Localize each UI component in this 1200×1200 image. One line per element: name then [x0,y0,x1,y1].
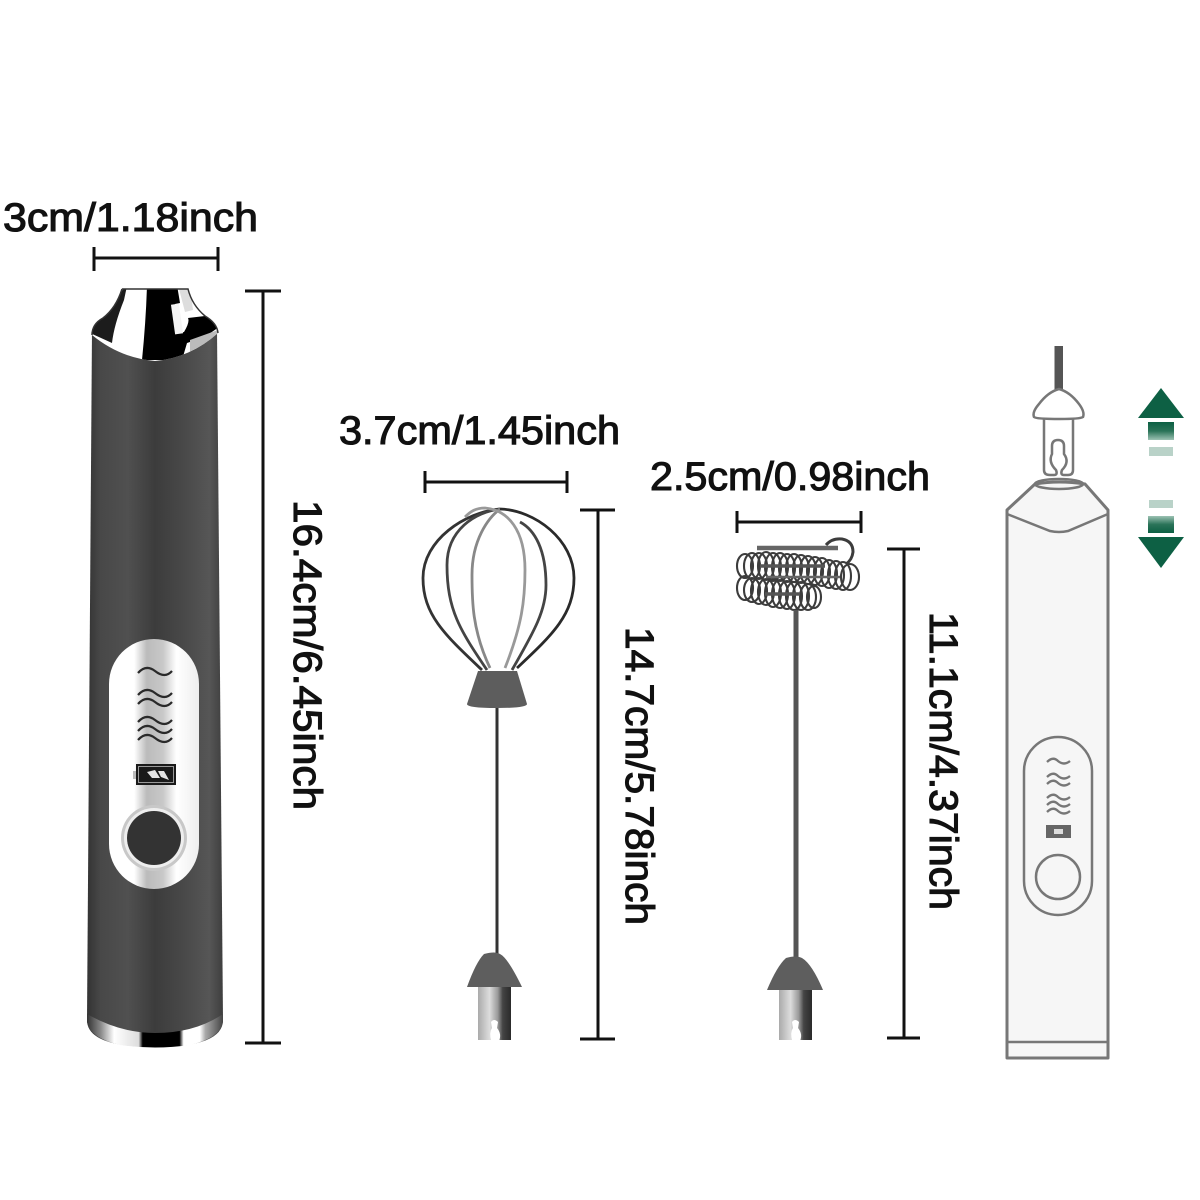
chrome bottom ring [87,1014,223,1048]
power button [121,805,187,871]
shaft stub [1054,346,1063,390]
label: whisk length: 14.7cm/5.78inch [617,627,661,925]
battery icon [133,764,176,785]
balloon whisk attachment [423,508,574,1041]
spring coil attachment [737,539,859,1041]
coil spring [737,539,859,610]
outline handle body [1007,482,1108,1058]
dimension line: coil width [737,511,861,533]
dimension line: whisk length [580,510,615,1039]
dimension line: coil length [887,549,920,1038]
whisk wires [423,508,574,670]
outline battery icon [1046,825,1071,838]
dimension line: handle width [94,247,218,271]
label: whisk width: 3.7cm/1.45inch [339,409,620,453]
handheld frother [87,285,223,1048]
outline speed waves [1047,759,1070,814]
outline power button [1036,855,1080,899]
dimension line: handle length [245,291,281,1043]
outline control panel [1024,737,1092,915]
dimension line: whisk width [425,471,567,493]
label: 3cm width: 3cm/1.18inch [3,196,258,240]
control panel [109,639,199,889]
arrow: push down [1138,500,1184,568]
whisk hub [467,671,527,708]
coil shaft [794,610,798,960]
outline handle details [1007,479,1108,1042]
coil connector [767,956,823,1041]
label: coil length: 11.1cm/4.37inch [921,612,965,910]
whisk connector [467,952,522,1041]
handle body [87,330,223,1047]
chrome top cap [92,290,218,361]
chrome top outline [92,289,218,335]
label: handle length: 16.4cm/6.45inch [285,500,329,810]
installation outline illustration [1007,346,1108,1058]
whisk shaft [496,708,498,954]
attachment connector outline [1034,389,1084,475]
label: coil width: 2.5cm/0.98inch [650,455,930,499]
speed wave icons [138,668,172,742]
arrow: pull up [1138,388,1184,456]
